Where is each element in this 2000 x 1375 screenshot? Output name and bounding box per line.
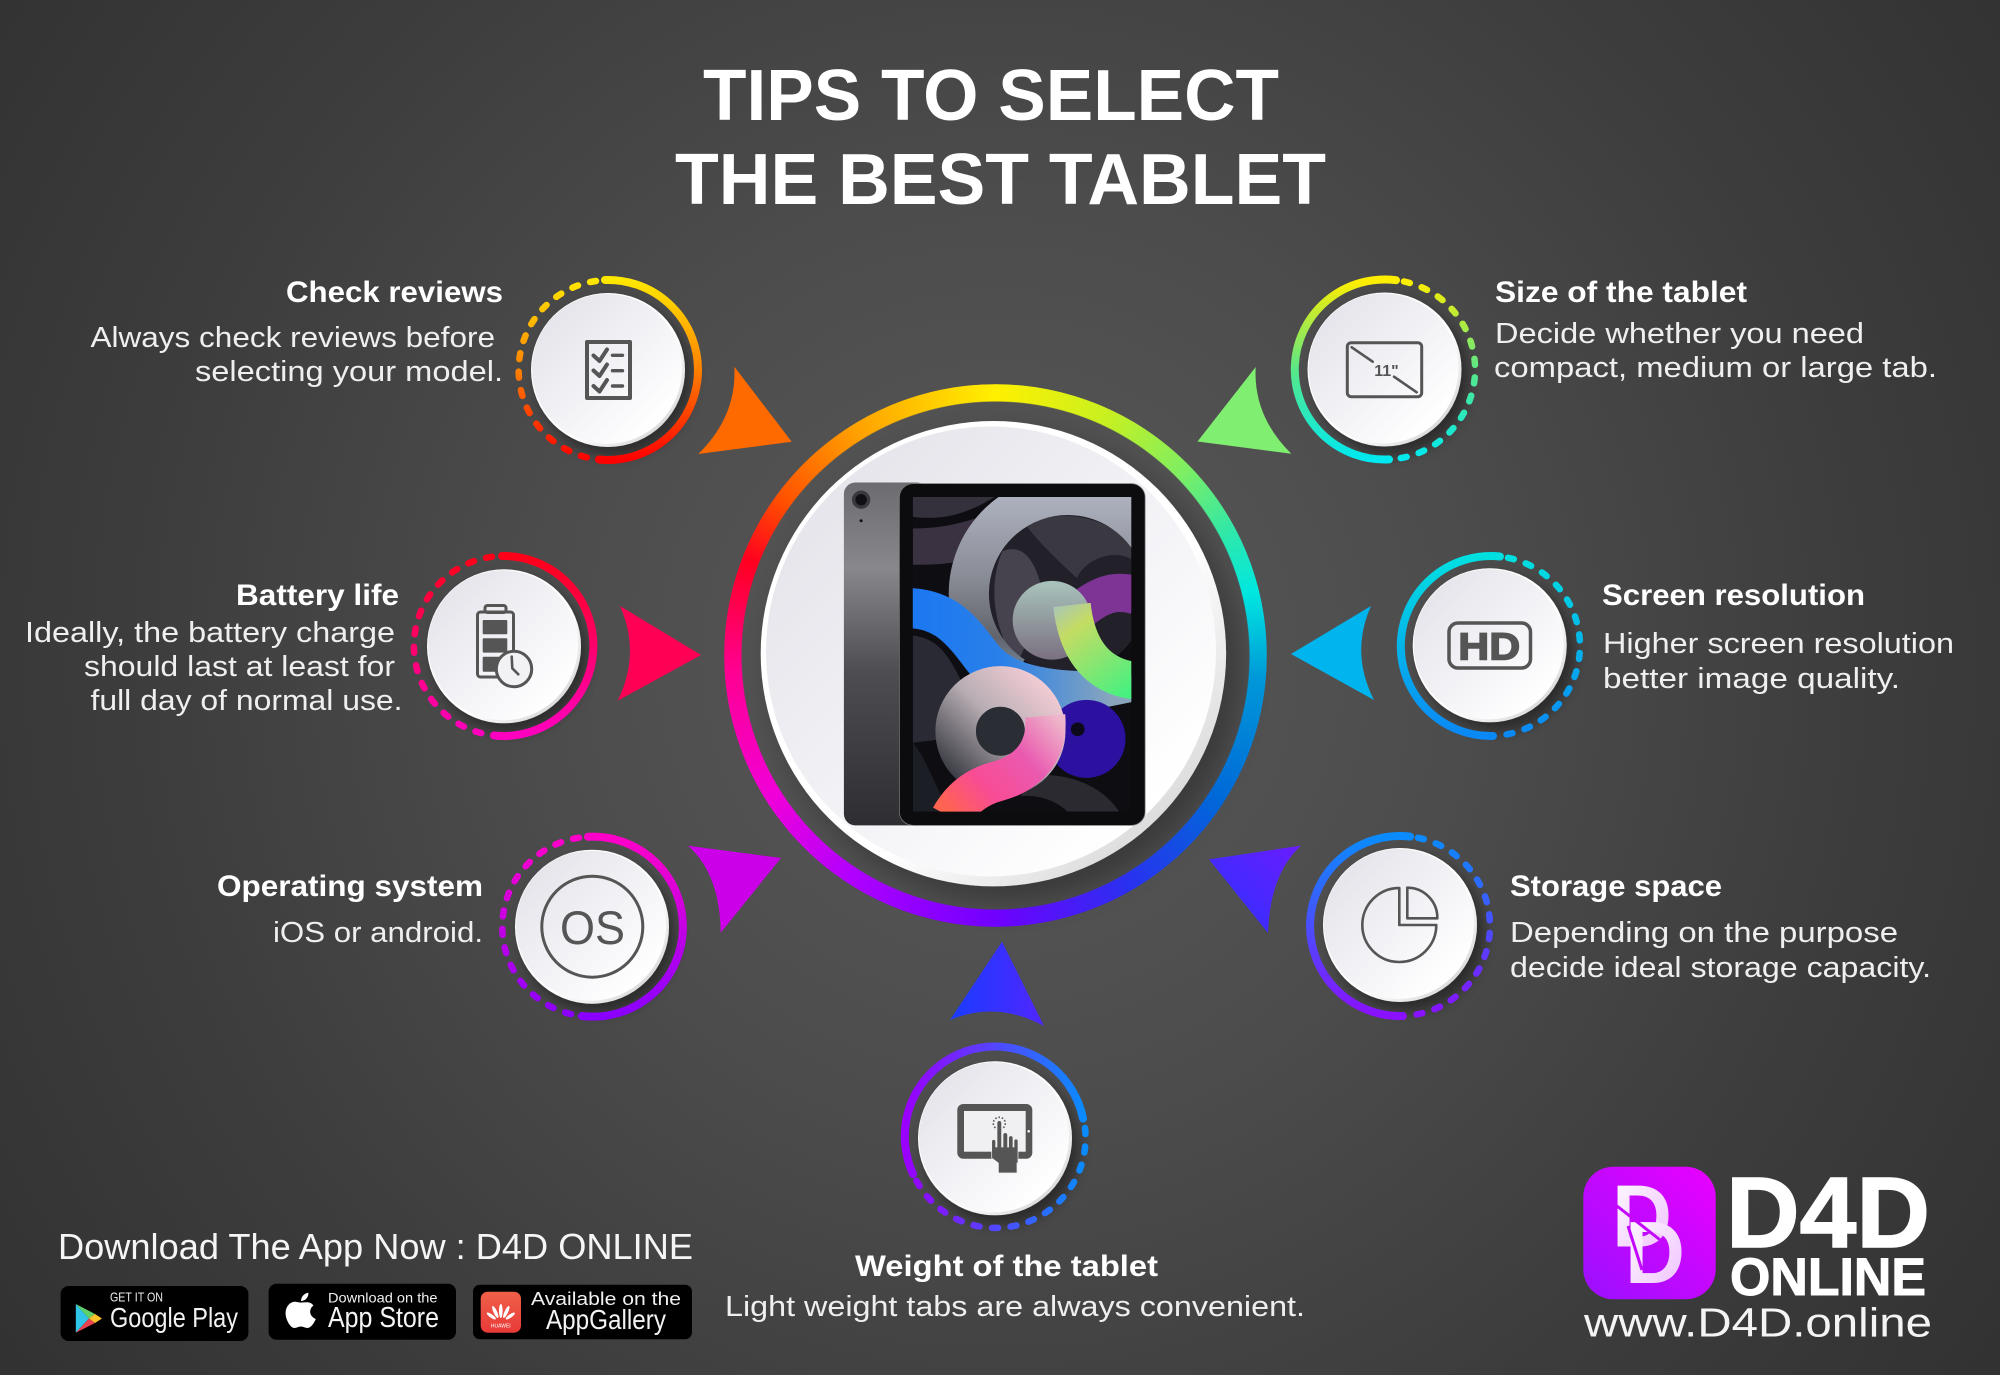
panel: battery life [25, 556, 593, 736]
panel: storage space [1310, 836, 1931, 1016]
title [675, 56, 1326, 220]
badge: check reviews [519, 280, 698, 460]
description: Always check reviews before [90, 322, 495, 354]
description [1494, 318, 1937, 384]
badge: Google Play: Google Play [110, 1302, 238, 1333]
badge: App Store [269, 1284, 456, 1340]
description: iOS or android. [273, 917, 483, 949]
icon: play triangle [76, 1304, 102, 1333]
description: Light weight tabs are always convenient. [725, 1291, 1305, 1323]
icon: checklist [587, 342, 630, 398]
tablet illustration [844, 482, 1153, 825]
title: THE BEST TABLET [675, 140, 1326, 220]
icon: battery with clock [478, 606, 532, 687]
logo wordmark: D4D [1726, 1157, 1930, 1269]
badge: AppGallery: AppGallery [546, 1304, 666, 1335]
description [1603, 628, 1954, 695]
logo subtitle: ONLINE [1730, 1248, 1926, 1307]
description [25, 617, 402, 717]
panel: operating system [217, 837, 683, 1017]
description: Decide whether you need [1495, 318, 1864, 350]
heading: Operating system [217, 870, 483, 903]
heading: Weight of the tablet [855, 1250, 1158, 1283]
central rainbow ring [724, 384, 1267, 927]
heading: Storage space [1510, 870, 1722, 903]
panel: check reviews [90, 276, 698, 460]
website: www.D4D.online [1583, 1300, 1932, 1346]
heading: Battery life [236, 579, 399, 612]
tablet back [844, 482, 928, 825]
icon: HD: HD [1458, 626, 1520, 668]
badge: screen [1401, 556, 1580, 736]
badge: Google Play: GET IT ON [110, 1290, 163, 1305]
panel: weight of the tablet [725, 1047, 1305, 1323]
icon: OS [542, 876, 643, 977]
logo icon: D [1625, 1203, 1685, 1302]
badge: App Store: Download on the [328, 1290, 438, 1306]
logo icon [1583, 1167, 1716, 1302]
description: Depending on the purpose [1510, 917, 1898, 949]
badge: os [502, 837, 683, 1017]
badge: AppGallery [473, 1285, 692, 1339]
icon: OS: OS [560, 901, 625, 954]
description: Higher screen resolution [1603, 628, 1954, 660]
arrow: violet blue [1209, 846, 1301, 933]
badge: App Store: App Store [328, 1302, 439, 1334]
description: better image quality. [1603, 663, 1900, 695]
download heading: Download The App Now : D4D ONLINE [58, 1226, 693, 1267]
heading: Screen resolution [1602, 579, 1865, 612]
description: selecting your model. [195, 356, 503, 388]
arrow: blue [950, 942, 1044, 1026]
arrow: orange [698, 367, 792, 454]
heading: Size of the tablet [1495, 276, 1747, 309]
badge: battery [414, 556, 593, 736]
description [90, 322, 503, 388]
icon: apple [286, 1293, 316, 1328]
panel: size of the tablet [1295, 276, 1937, 459]
arrow: cyan [1291, 606, 1374, 700]
icon: 11 inch screen: 11" [1374, 363, 1399, 380]
tablet front [899, 484, 1145, 825]
badge: storage [1310, 836, 1490, 1016]
arrow: pink [618, 606, 701, 701]
badge: size [1295, 279, 1475, 459]
arrow: purple [688, 846, 781, 933]
heading: Check reviews [286, 276, 503, 309]
badge: weight [905, 1047, 1086, 1228]
icon: HD [1449, 623, 1530, 668]
logo icon: D [1612, 1167, 1672, 1266]
tablet wallpaper [912, 497, 1132, 812]
description: should last at least for [84, 651, 395, 683]
badge: AppGallery: Available on the [531, 1289, 681, 1309]
icon: 11 inch screen [1347, 343, 1422, 397]
description [1510, 917, 1931, 984]
icon: touch tablet [957, 1104, 1032, 1173]
icon: pie chart [1362, 888, 1437, 962]
arrow: green [1198, 367, 1291, 454]
panel: screen resolution [1401, 556, 1954, 736]
description: full day of normal use. [90, 685, 402, 717]
icon: huawei [481, 1292, 521, 1333]
description: compact, medium or large tab. [1494, 352, 1937, 384]
title: TIPS TO SELECT [703, 56, 1279, 136]
icon: huawei: HUAWEI [491, 1324, 511, 1330]
badge: Google Play [61, 1286, 248, 1341]
description: decide ideal storage capacity. [1510, 952, 1931, 984]
logo: D4D Online [1583, 1157, 1932, 1346]
description: Ideally, the battery charge [25, 617, 395, 649]
